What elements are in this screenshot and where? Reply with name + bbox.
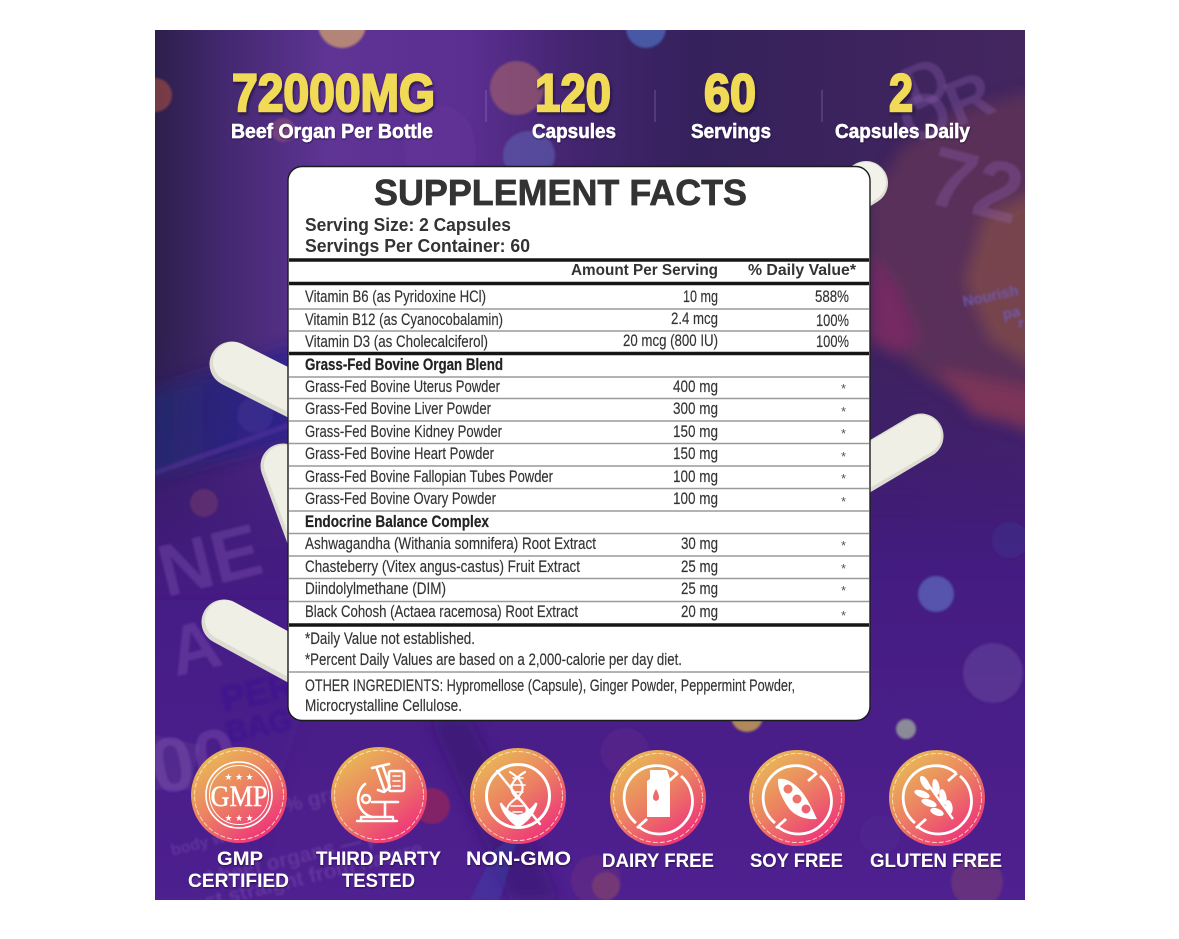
stat: 60 servings: 60 bbox=[704, 64, 756, 123]
background watermark lettering: % gras bbox=[281, 779, 353, 818]
capsule: right bbox=[830, 435, 921, 490]
organ blend rows: Grass-Fed Bovine Organ Blend bbox=[305, 356, 503, 374]
endocrine complex rows: 20 mg bbox=[681, 603, 718, 621]
endocrine complex rows bbox=[305, 513, 846, 623]
stat strip bbox=[231, 64, 971, 143]
footnotes: *Percent Daily Values are based on a 2,000-calorie per day diet. bbox=[305, 651, 682, 669]
background watermark lettering: ed beef organs — pu bbox=[187, 822, 394, 895]
stat: 72000MG: 72000MG bbox=[232, 64, 435, 123]
organ blend rows: 400 mg bbox=[673, 378, 718, 396]
vitamin rows: Vitamin D3 (as Cholecalciferol) bbox=[305, 333, 488, 351]
organ blend rows: 150 mg bbox=[673, 445, 718, 463]
endocrine complex rows: * bbox=[841, 561, 846, 576]
vitamin rows: 100% bbox=[816, 312, 849, 330]
endocrine complex rows: * bbox=[841, 538, 846, 553]
badge: dairy free bbox=[602, 750, 714, 872]
badges row bbox=[188, 747, 1002, 892]
other ingredients: Microcrystalline Cellulose. bbox=[305, 697, 462, 715]
organ blend rows: Grass-Fed Bovine Ovary Powder bbox=[305, 490, 496, 508]
endocrine complex rows: * bbox=[841, 583, 846, 598]
heading: SUPPLEMENT FACTS bbox=[374, 172, 747, 213]
capsule: upper left bbox=[232, 362, 335, 416]
background watermark lettering: 00 bbox=[143, 710, 244, 811]
endocrine complex rows: Chasteberry (Vitex angus-castus) Fruit Extract bbox=[305, 558, 580, 576]
icon: wheat bbox=[903, 766, 971, 834]
badge: soy free: SOY FREE bbox=[750, 850, 843, 872]
endocrine complex rows: 30 mg bbox=[681, 535, 718, 553]
badge: non-GMO bbox=[466, 748, 571, 870]
stat: 2 capsules daily: 2 bbox=[889, 64, 913, 123]
background watermark lettering: D bbox=[891, 43, 960, 124]
organ blend rows: 100 mg bbox=[673, 468, 718, 486]
background watermark lettering: Nourish bbox=[961, 282, 1020, 311]
endocrine complex rows: 25 mg bbox=[681, 580, 718, 598]
column headers: % Daily Value* bbox=[748, 262, 857, 279]
background artwork bbox=[138, 0, 1040, 914]
organ blend rows: * bbox=[841, 404, 846, 419]
badge: GMP certified bbox=[188, 747, 289, 892]
other ingredients: OTHER INGREDIENTS: Hypromellose (Capsule), Ginger Powder, Peppermint Powder, bbox=[305, 677, 795, 695]
badge: gluten free bbox=[870, 750, 1002, 872]
organ blend rows: Grass-Fed Bovine Liver Powder bbox=[305, 400, 491, 418]
background watermark lettering bbox=[143, 43, 1033, 914]
footnotes: *Daily Value not established. bbox=[305, 630, 475, 648]
organ blend rows bbox=[305, 356, 846, 509]
footnotes bbox=[305, 630, 682, 669]
background watermark lettering: PER bbox=[217, 664, 298, 720]
stat: 72000MG bbox=[231, 64, 435, 143]
endocrine complex rows: * bbox=[841, 608, 846, 623]
icon: soybean bbox=[763, 766, 831, 834]
endocrine complex rows: Black Cohosh (Actaea racemosa) Root Extract bbox=[305, 603, 578, 621]
stat: 2 capsules daily bbox=[835, 64, 971, 143]
badge: GMP certified: GMP bbox=[217, 848, 263, 870]
serving info bbox=[305, 215, 530, 256]
endocrine complex rows: 25 mg bbox=[681, 558, 718, 576]
endocrine complex rows: Ashwagandha (Withania somnifera) Root Extract bbox=[305, 535, 596, 553]
icon: GMP seal: ★ ★ ★ bbox=[224, 813, 254, 823]
stat: 120 capsules: Capsules bbox=[532, 121, 616, 143]
endocrine complex rows: Endocrine Balance Complex bbox=[305, 513, 490, 531]
organ blend rows: Grass-Fed Bovine Kidney Powder bbox=[305, 423, 502, 441]
capsules behind panel bbox=[224, 182, 921, 694]
vitamin rows bbox=[305, 288, 849, 351]
organ blend rows: * bbox=[841, 449, 846, 464]
icon: GMP seal: ★ ★ ★ bbox=[224, 772, 254, 782]
organ blend rows: Grass-Fed Bovine Uterus Powder bbox=[305, 378, 500, 396]
bokeh dots bbox=[318, 30, 366, 50]
serving info: Serving Size: 2 Capsules bbox=[305, 215, 511, 235]
vitamin rows: 10 mg bbox=[683, 288, 718, 306]
column headers bbox=[571, 262, 857, 279]
background watermark lettering: OR bbox=[888, 57, 1004, 159]
vitamin rows: 2.4 mcg bbox=[671, 310, 718, 328]
badge: non-GMO: NON-GMO bbox=[466, 848, 571, 870]
background watermark lettering: NE bbox=[150, 507, 270, 613]
capsule: upper right bbox=[830, 182, 866, 205]
organ blend rows: 150 mg bbox=[673, 423, 718, 441]
capsule: middle left bbox=[283, 465, 313, 545]
badge: third party tested: THIRD PARTY bbox=[316, 848, 441, 870]
background watermark lettering: r bbox=[1018, 315, 1024, 332]
stat: 60 servings bbox=[691, 64, 771, 143]
organ blend rows: * bbox=[841, 381, 846, 396]
organ blend rows: * bbox=[841, 426, 846, 441]
stat: 72000MG: Beef Organ Per Bottle bbox=[231, 121, 433, 143]
endocrine complex rows: Diindolylmethane (DIM) bbox=[305, 580, 446, 598]
badge: dairy free: DAIRY FREE bbox=[602, 850, 714, 872]
icon: GMP seal: GMP bbox=[210, 780, 268, 813]
vitamin rows: Vitamin B12 (as Cyanocobalamin) bbox=[305, 311, 503, 329]
vitamin rows: 588% bbox=[815, 288, 849, 306]
stat: 60 servings: Servings bbox=[691, 121, 771, 143]
stat: 120 capsules bbox=[532, 64, 616, 143]
vitamin rows: Vitamin B6 (as Pyridoxine HCl) bbox=[305, 288, 486, 306]
background watermark lettering: st straight from nature bbox=[202, 837, 425, 914]
badge: gluten free: GLUTEN FREE bbox=[870, 850, 1002, 872]
icon: microscope bbox=[357, 764, 404, 821]
stat: 120 capsules: 120 bbox=[535, 64, 611, 123]
organ blend rows: 100 mg bbox=[673, 490, 718, 508]
serving info: Servings Per Container: 60 bbox=[305, 236, 530, 256]
right orange packet bbox=[870, 92, 1025, 390]
badge: soy free bbox=[749, 750, 845, 872]
panel: supplement facts bbox=[288, 166, 870, 720]
organ blend rows: 300 mg bbox=[673, 400, 718, 418]
badge: GMP certified: CERTIFIED bbox=[188, 870, 289, 892]
badge: third party tested: TESTED bbox=[342, 870, 415, 892]
icon: crossed DNA bbox=[486, 764, 550, 828]
other ingredients bbox=[305, 677, 795, 715]
capsule: lower left bbox=[224, 620, 356, 694]
background watermark lettering: body w bbox=[169, 830, 227, 860]
icon: milk carton bbox=[624, 766, 692, 834]
column headers: Amount Per Serving bbox=[571, 262, 718, 279]
organ blend rows: * bbox=[841, 494, 846, 509]
badge: third party tested bbox=[316, 747, 441, 892]
background watermark lettering: pa bbox=[1001, 303, 1022, 323]
organ blend rows: Grass-Fed Bovine Fallopian Tubes Powder bbox=[305, 468, 553, 486]
background watermark lettering: 72 bbox=[919, 128, 1033, 242]
icon: GMP seal bbox=[206, 762, 272, 828]
organ blend rows: * bbox=[841, 471, 846, 486]
vitamin rows: 20 mcg (800 IU) bbox=[623, 332, 718, 350]
vitamin rows: 100% bbox=[816, 333, 849, 351]
stat: 2 capsules daily: Capsules Daily bbox=[835, 121, 971, 143]
organ blend rows: Grass-Fed Bovine Heart Powder bbox=[305, 445, 494, 463]
background watermark lettering: A bbox=[160, 603, 228, 691]
background watermark lettering: BAG bbox=[223, 704, 295, 750]
